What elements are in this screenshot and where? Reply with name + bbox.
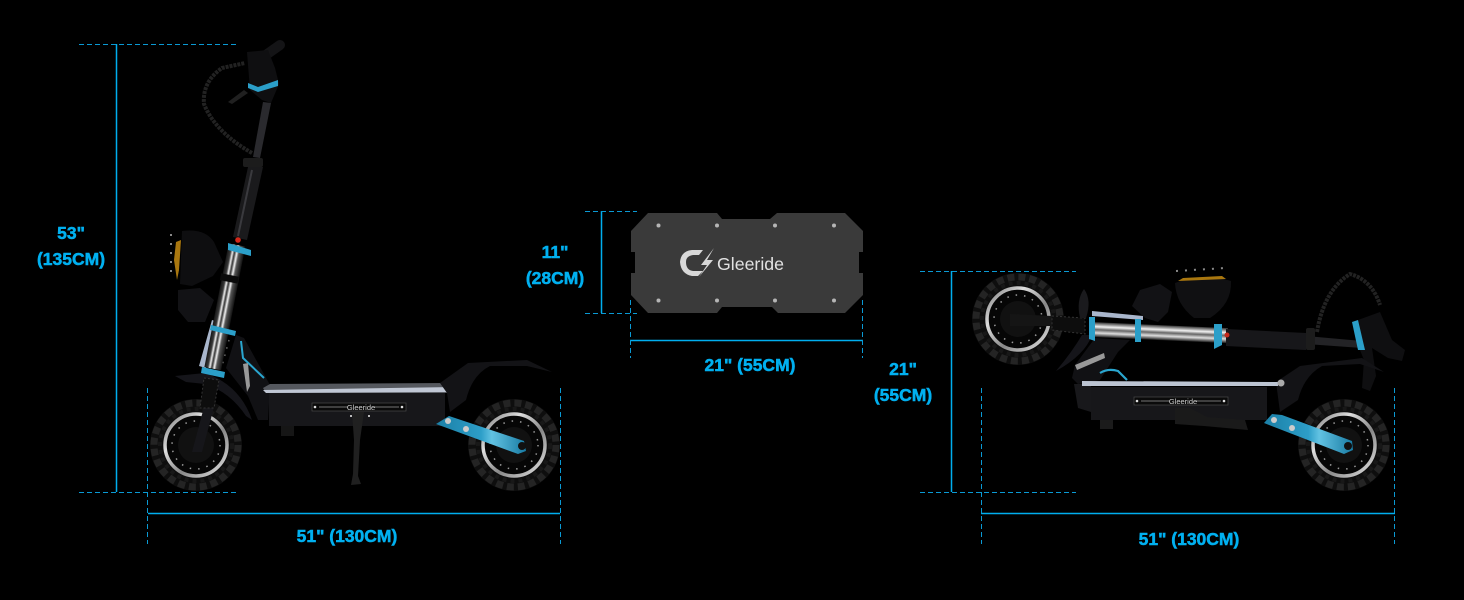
brake lever <box>228 90 248 104</box>
label: 135 cm height: (135CM) <box>37 249 105 269</box>
front wheel <box>150 399 242 491</box>
kickstand <box>351 412 364 485</box>
fork spring <box>1052 316 1085 334</box>
blue clamp lower <box>201 367 225 378</box>
folded blue swing arm <box>1264 414 1353 454</box>
label: 11 in height: 11" <box>542 242 568 262</box>
folded deck plate <box>1082 381 1278 386</box>
width dimension: plate <box>630 300 863 358</box>
height dimension: folded <box>920 271 1076 492</box>
Gleeride wordmark: Gleeride <box>717 254 784 274</box>
blue clamp upper <box>228 243 251 256</box>
fender folded <box>1079 289 1089 318</box>
height dimension: plate <box>585 211 637 314</box>
length dimension: folded <box>981 388 1395 544</box>
scooter: folded side view <box>972 268 1405 491</box>
front axle fork <box>1010 314 1052 326</box>
length dimension: standing <box>148 388 560 544</box>
stem collar <box>243 158 263 167</box>
Gleeride logo mark <box>680 248 714 277</box>
folded suspension plate <box>1092 311 1143 320</box>
fork spring <box>200 378 219 408</box>
folded headlight mount <box>1132 284 1172 322</box>
rear wheel <box>468 399 560 491</box>
stem highlight <box>238 170 252 236</box>
chrome fork tube <box>204 243 245 370</box>
folded handlebar <box>1358 312 1405 391</box>
folded brake cable <box>1317 274 1380 332</box>
folded black stem <box>1226 329 1306 350</box>
deck plate panel <box>631 213 863 313</box>
label: 21 in height: 21" <box>889 359 917 379</box>
blue cable front <box>241 341 264 378</box>
upper stem <box>253 102 271 158</box>
deck body <box>269 393 445 426</box>
folded headlight <box>1175 277 1231 318</box>
frame bolts <box>222 340 229 366</box>
folded front wheel <box>972 273 1064 365</box>
battery foot <box>281 426 294 436</box>
kickstand hinge detail <box>243 363 250 392</box>
frame neck <box>226 335 270 420</box>
red cap folded <box>1224 332 1230 338</box>
blue clamp middle <box>210 325 236 336</box>
folded chrome tube <box>1091 322 1228 343</box>
headlight <box>180 230 223 286</box>
folded blue handlebar clamp <box>1352 320 1365 350</box>
blue clamps folded <box>1089 317 1222 349</box>
label: standing length: 51" (130CM) <box>297 526 397 546</box>
headlight bolts <box>170 234 172 278</box>
label: 28 cm height: (28CM) <box>526 268 584 288</box>
folded upper stem <box>1306 336 1362 348</box>
headlight mount <box>178 288 214 322</box>
amber lens folded <box>1178 276 1226 281</box>
blue handlebar clamp <box>248 80 278 92</box>
front fender <box>175 373 252 420</box>
label: plate width: 21" (55CM) <box>705 355 795 375</box>
folded battery foot <box>1100 420 1113 429</box>
stem collar folded <box>1306 328 1315 350</box>
label: 53 in height: 53" <box>57 223 85 243</box>
headlight amber <box>174 240 181 280</box>
red stem cap <box>235 237 241 243</box>
suspension plate <box>199 320 218 368</box>
plate shape <box>631 213 863 313</box>
height dimension: standing <box>79 44 236 492</box>
folded deck body <box>1091 387 1267 420</box>
blue swing arm <box>436 416 526 454</box>
rear fender <box>440 360 552 412</box>
stand bracket bolts <box>350 415 370 417</box>
black fork clamp <box>220 273 239 284</box>
frame neck folded <box>1072 338 1130 384</box>
folded kickstand <box>1175 408 1248 430</box>
label: 55 cm height: (55CM) <box>874 385 932 405</box>
folded deck rear end cap <box>1074 384 1091 412</box>
front fork lower <box>192 407 214 452</box>
deck plate <box>263 383 457 393</box>
handlebar <box>247 50 279 103</box>
plate bolts <box>656 224 836 302</box>
folded rear fender <box>1276 358 1384 412</box>
folded rear wheel <box>1298 399 1390 491</box>
label: folded length: 51" (130CM) <box>1139 529 1239 549</box>
brake cable <box>204 63 252 153</box>
handlebar grip <box>263 45 280 57</box>
headlight bolts folded <box>1176 268 1226 271</box>
kickstand hinge folded <box>1075 353 1105 370</box>
scooter: standing side view <box>150 45 560 491</box>
cable blue folded <box>1100 370 1127 380</box>
black steering stem <box>233 167 263 240</box>
